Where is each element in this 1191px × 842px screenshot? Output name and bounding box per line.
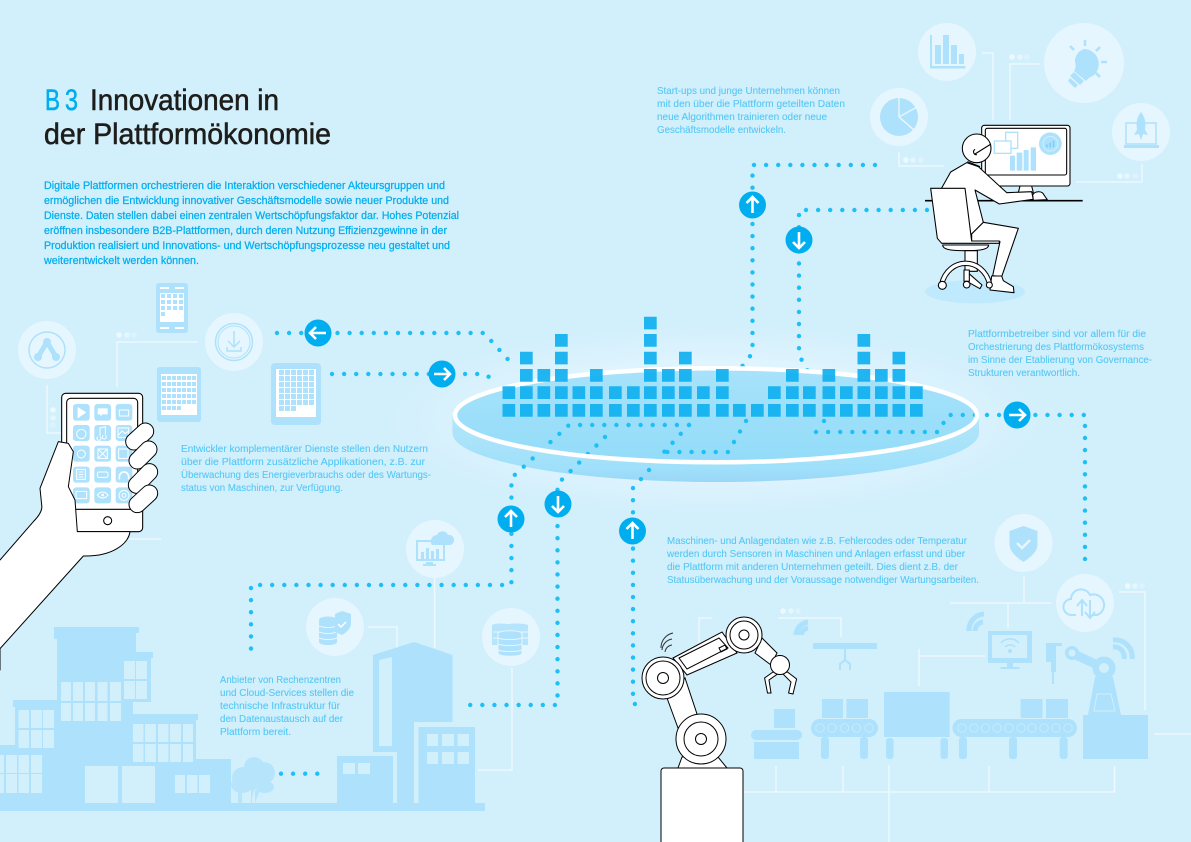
text: start-ups: neue Algorithmen trainieren oder neue: [657, 111, 827, 123]
icon: cloud monitor circle: [406, 520, 464, 578]
arrow: up: [739, 192, 766, 218]
intro text block: ermöglichen die Entwicklung innovativer Geschäftsmodelle sowie neuer Produkte und: [44, 195, 449, 207]
text: platform operators: Strukturen verantwortlich.: [968, 367, 1080, 379]
arrow: down: [786, 226, 812, 254]
conveyor one: [811, 699, 878, 759]
icon: rocket laptop circle: [1112, 103, 1170, 161]
factory line: [751, 614, 1148, 759]
text: developers: status von Maschinen, zur Verfügung.: [181, 482, 343, 494]
white robot arm: [642, 617, 797, 842]
text: start-ups: Geschäftsmodelle entwickeln.: [657, 124, 786, 136]
text: machine data: werden durch Sensoren in Maschinen und Anlagen erfasst und über: [666, 548, 965, 560]
intro text block: weiterentwickelt werden können.: [43, 255, 199, 267]
floor shadow: [925, 280, 1025, 303]
icon: tablet: [271, 363, 321, 425]
text: start-ups: [657, 85, 845, 136]
arrow: right to factory: [1004, 402, 1030, 428]
text: developers: [181, 443, 431, 494]
icon: pie chart circle: [870, 88, 928, 146]
icon: database circle: [482, 608, 540, 666]
intro text block: Dienste. Daten stellen dabei einen zentralen Wertschöpfungsfaktor dar. Hohes Potenzial: [44, 210, 459, 222]
office buildings: [337, 642, 475, 803]
text: machine data: [666, 535, 979, 586]
platform disc: [386, 325, 1046, 515]
office chair: [931, 188, 999, 289]
text: developers: über die Plattform zusätzliche Applikationen, z.B. zur: [181, 456, 425, 468]
title: 3: [65, 84, 78, 117]
data blocks on platform: [502, 317, 923, 417]
text: data centres: technische Infrastruktur für: [220, 700, 340, 712]
text: data centres: den Datenaustausch auf der: [220, 713, 343, 725]
control monitor: [969, 614, 1032, 669]
gripper station: [796, 622, 877, 670]
text: platform operators: im Sinne der Etablierung von Governance-: [968, 354, 1152, 366]
title: der Plattformökonomie: [44, 118, 331, 151]
hand holding smartphone: [0, 393, 149, 670]
text: machine data: Maschinen- und Anlagendaten wie z.B. Fehlercodes oder Temperatur: [667, 535, 967, 547]
text: platform operators: Plattformbetreiber sind vor allem für die: [968, 328, 1146, 340]
tree: [231, 757, 275, 803]
text: data centres: und Cloud-Services stellen die: [220, 687, 354, 699]
platform white ring: [455, 368, 977, 462]
intro text block: Digitale Plattformen orchestrieren die Interaktion verschiedener Akteursgruppen und: [44, 180, 445, 192]
icon: light bulb circle: [1044, 23, 1124, 103]
text: developers: Entwickler komplementärer Dienste stellen den Nutzern: [181, 443, 428, 455]
icon: database shield circle: [306, 598, 364, 656]
icon: hub circle: [18, 321, 76, 379]
computer monitor: [982, 125, 1070, 193]
intro text block: eröffnen insbesondere B2B-Plattformen, durch deren Nutzung Effizienzgewinne in der: [44, 225, 447, 237]
packing table: [751, 709, 802, 759]
intro text block: [43, 180, 459, 267]
icon: download circle: [205, 313, 263, 371]
person body: [940, 134, 1047, 293]
conveyor two: [952, 699, 1077, 759]
industrial robot: [1046, 640, 1148, 759]
person at computer: [925, 125, 1083, 303]
text: data centres: Plattform bereit.: [220, 726, 291, 738]
text: data centres: [220, 674, 354, 738]
small indicator dots: [50, 54, 1145, 614]
text: machine data: Statusüberwachung und der Voraussage notwendiger Wartungsarbeiten.: [667, 574, 979, 586]
text: machine data: die Plattform mit anderen Unternehmen geteilt. Dies dient z.B. der: [667, 561, 958, 573]
icon: bar chart circle: [918, 23, 976, 81]
hand and arm: [0, 442, 130, 670]
intro text block: Produktion realisiert und Innovations- und Wertschöpfungsprozesse neu gestaltet und: [44, 240, 450, 252]
text: developers: Überwachung des Energieverbrauchs oder des Wartungs-: [181, 469, 431, 481]
icon: cloud transfer circle: [1056, 574, 1114, 632]
arrow: down to data centre: [544, 490, 572, 518]
city skyline left: [0, 627, 485, 811]
icon: small tablet: [157, 367, 201, 422]
arrow: up from machines: [619, 518, 646, 544]
smartphone: [62, 393, 143, 532]
title: B: [45, 84, 60, 117]
icon: small phone: [156, 283, 188, 333]
arrow: right: [428, 360, 456, 388]
dotted data paths: [251, 165, 1085, 774]
processing machine: [884, 692, 950, 759]
text: start-ups: Start-ups und junge Unternehmen können: [657, 85, 840, 97]
icon: shield circle: [994, 514, 1052, 572]
arrow: left: [304, 320, 332, 346]
text: platform operators: Orchestrierung des Plattformökosystems: [968, 341, 1144, 353]
text: platform operators: [968, 328, 1152, 379]
fingers: [134, 431, 149, 504]
desk: [925, 198, 1083, 203]
arrow: up from cloud: [498, 506, 524, 532]
text: start-ups: mit den über die Plattform geteilten Daten: [657, 98, 845, 110]
text: data centres: Anbieter von Rechenzentren: [220, 674, 341, 686]
title: Innovationen in: [90, 84, 279, 117]
